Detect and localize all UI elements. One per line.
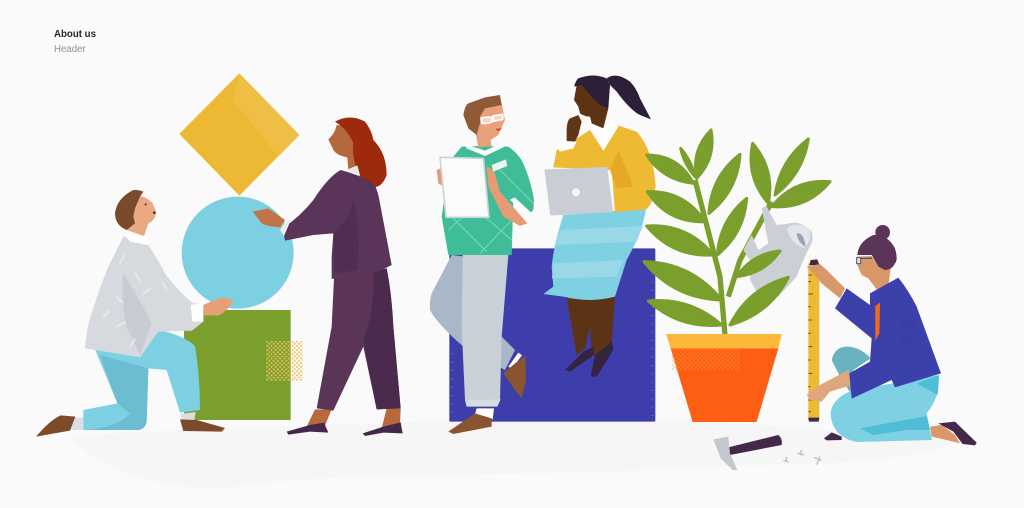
sloth face — [787, 225, 810, 248]
green square — [184, 310, 291, 420]
leaf over sloth — [737, 251, 780, 277]
woman trousers — [317, 268, 401, 411]
woman collar — [588, 118, 618, 151]
woman glasses — [857, 256, 872, 260]
halftone patch — [266, 341, 303, 381]
man face and neck — [476, 103, 505, 147]
ruler body — [808, 263, 819, 420]
woman hair — [857, 235, 897, 270]
man cuff — [191, 303, 203, 322]
woman foot — [930, 425, 960, 443]
trouser shading — [363, 268, 401, 409]
woman hand — [253, 208, 285, 227]
woman shoes — [565, 342, 613, 377]
pot rim — [666, 334, 782, 348]
laptop — [545, 167, 613, 215]
ruler ticks — [808, 275, 813, 412]
man shoes — [36, 415, 225, 437]
woman collar — [346, 165, 360, 175]
woman jacket — [835, 278, 941, 399]
header text block: Header — [54, 44, 86, 55]
ground shadow — [70, 416, 960, 488]
inner orange top — [875, 303, 880, 341]
sweater — [553, 125, 656, 212]
green sweater — [442, 146, 534, 255]
man eye — [145, 203, 147, 205]
woman shoes — [824, 422, 977, 445]
shirt flecks — [103, 255, 167, 347]
ponytail — [607, 76, 651, 119]
back trouser leg — [430, 255, 515, 370]
blue circle — [182, 197, 294, 309]
man neck and face — [123, 196, 156, 236]
sweater shading — [610, 150, 633, 188]
man mouth — [496, 127, 502, 131]
potted plant — [644, 130, 830, 422]
man left hand — [437, 167, 447, 188]
woman legs — [567, 296, 615, 358]
sloth body — [743, 207, 812, 297]
nails — [783, 450, 821, 465]
woman hair — [335, 117, 387, 187]
tablet — [440, 157, 489, 217]
ruler — [808, 259, 819, 422]
illustration: shapes and kneeling man with woman in suit — [36, 73, 403, 437]
sloth — [730, 207, 812, 325]
woman face — [328, 125, 363, 172]
man trousers — [83, 330, 200, 430]
front trouser leg — [462, 255, 508, 400]
yellow diamond — [179, 73, 299, 196]
jacket shading — [333, 200, 359, 273]
woman ankles — [307, 408, 401, 428]
trouser shading — [860, 375, 939, 435]
skirt stripes — [552, 226, 643, 278]
woman kneeling, back knee — [832, 347, 871, 393]
man mouth — [153, 211, 156, 214]
sleeve trim — [510, 197, 533, 216]
kneeling man — [36, 190, 233, 437]
illustration: blue block, man with tablet, woman with laptop — [430, 75, 656, 434]
trouser cuff — [465, 399, 501, 407]
dark blue block — [449, 248, 655, 422]
skirt — [543, 208, 646, 300]
woman face and neck — [574, 85, 608, 128]
man forearm — [487, 167, 527, 226]
man shirt — [85, 237, 203, 357]
woman bun — [875, 225, 890, 240]
woman with ruler — [807, 225, 977, 445]
pot halftone — [672, 348, 740, 370]
man collar — [465, 141, 507, 156]
woman hair — [574, 75, 610, 108]
hammer — [713, 435, 782, 470]
trouser shading — [87, 355, 148, 430]
ruler ends — [808, 259, 819, 422]
plant stems — [695, 180, 772, 335]
diamond highlight — [233, 73, 299, 157]
illustration: plant, sloth, woman with ruler — [644, 130, 977, 470]
leaf over sloth lower — [730, 277, 788, 325]
man socks — [68, 412, 196, 430]
woman trousers — [831, 375, 939, 442]
woman with laptop — [543, 75, 656, 377]
header text block — [54, 29, 96, 55]
man hand — [203, 297, 233, 315]
woman hand — [567, 115, 582, 142]
block speckle — [452, 273, 653, 418]
pocket pen — [492, 159, 507, 172]
glasses lens — [857, 258, 861, 264]
man hair — [115, 190, 143, 230]
woman shoes — [287, 422, 403, 436]
man hair — [463, 95, 502, 135]
glasses — [481, 114, 503, 123]
hammer head — [713, 437, 737, 470]
sloth eye patch — [797, 233, 806, 247]
woman sleeve cuff — [557, 140, 577, 152]
laptop logo — [572, 188, 580, 196]
plant leaves — [644, 130, 830, 325]
man collar — [124, 234, 149, 245]
woman face and neck — [857, 256, 891, 292]
lower hand — [807, 370, 852, 402]
woman cuff — [280, 219, 291, 236]
man with tablet — [430, 95, 534, 434]
sweater pattern — [448, 167, 533, 253]
shirt shading — [122, 273, 152, 355]
hammer handle — [728, 435, 782, 455]
woman jacket — [283, 170, 392, 279]
jacket halftone — [897, 320, 918, 350]
header text block: About us — [54, 29, 96, 40]
man shoes — [448, 356, 526, 434]
upper arm and hand — [807, 264, 845, 298]
pot body — [671, 348, 778, 422]
woman in suit — [253, 117, 403, 436]
man socks — [475, 353, 522, 419]
